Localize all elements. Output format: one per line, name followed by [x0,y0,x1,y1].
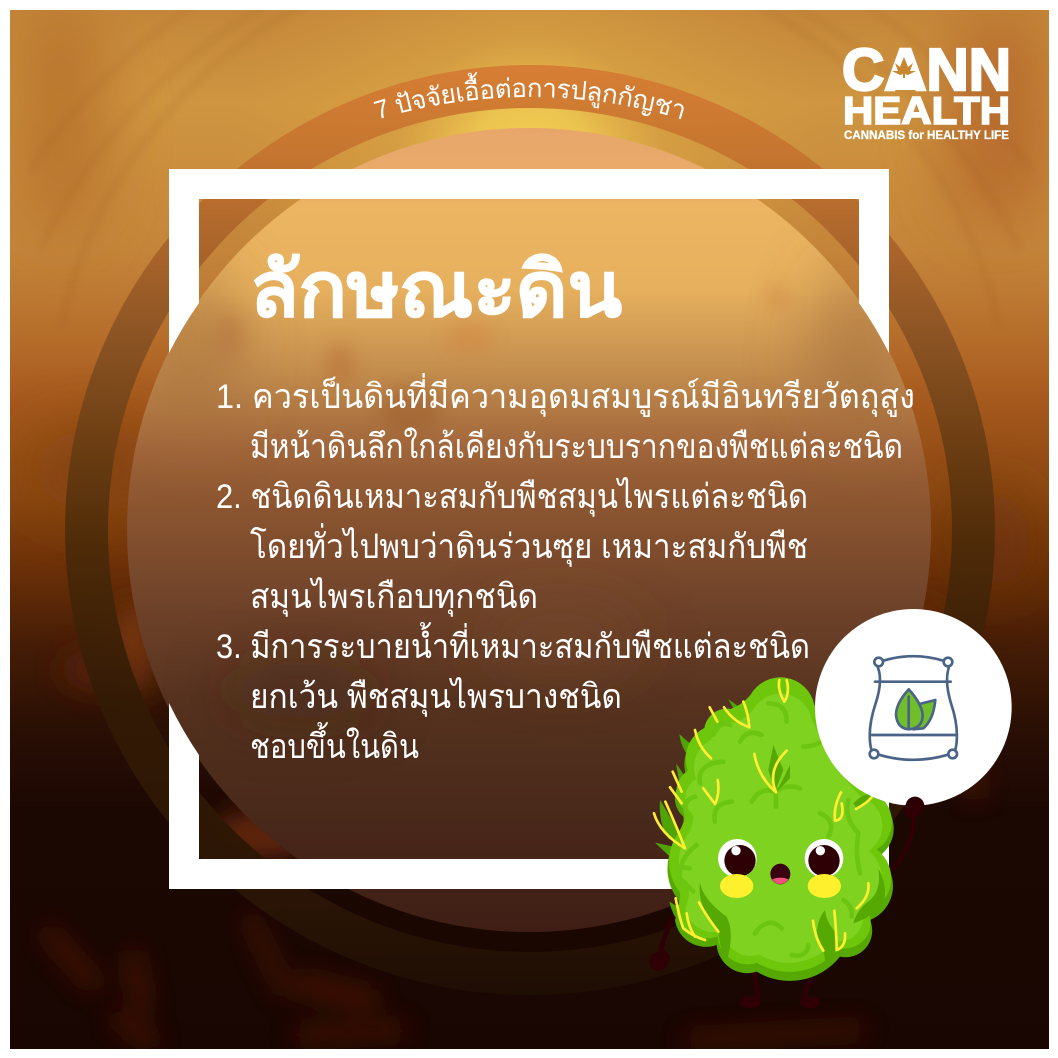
icon badge: white circle with soil bag [815,609,1012,806]
logo: CANN HEALTH [842,37,1011,142]
logo: CANN HEALTH: CANNABIS for HEALTHY LIFE [844,130,1009,142]
inner translucent circle [127,128,931,932]
white square frame [169,169,889,889]
face [718,839,843,898]
bud body [667,682,894,981]
body text list: โดยทั่วไปพบว่าดินร่วนซุย เหมาะสมกับพืช [250,523,808,567]
heading: ลักษณะดิน [250,248,622,333]
body text list: ชอบขึ้นในดิน [250,722,419,766]
curved subtitle: 7 ปัจจัยเอื้อต่อการปลูกกัญชา [374,72,684,120]
logo: CANN HEALTH: HEALTH [843,90,1010,133]
body text list: 3. มีการระบายน้ำที่เหมาะสมกับพืชแต่ละชนิด [216,622,810,666]
logo: CANN HEALTH: CANN [842,37,1011,103]
body text list: 2. ชนิดดินเหมาะสมกับพืชสมุนไพรแต่ละชนิด [216,477,808,517]
character hand holding badge [904,797,924,818]
body text list [216,373,915,766]
body text list: 1. ควรเป็นดินที่มีความอุดมสมบูรณ์มีอินทรียวัตถุสูง [216,373,915,417]
body text list: ยกเว้น พืชสมุนไพรบางชนิด [250,677,622,717]
character: green cannabis bud mascot [649,677,914,1008]
ring: dark circular band [65,65,995,995]
body text list: สมุนไพรเกือบทุกชนิด [250,577,538,617]
body text list: มีหน้าดินลึกใกล้เคียงกับระบบรากของพืชแต่ละชนิด [250,427,903,466]
